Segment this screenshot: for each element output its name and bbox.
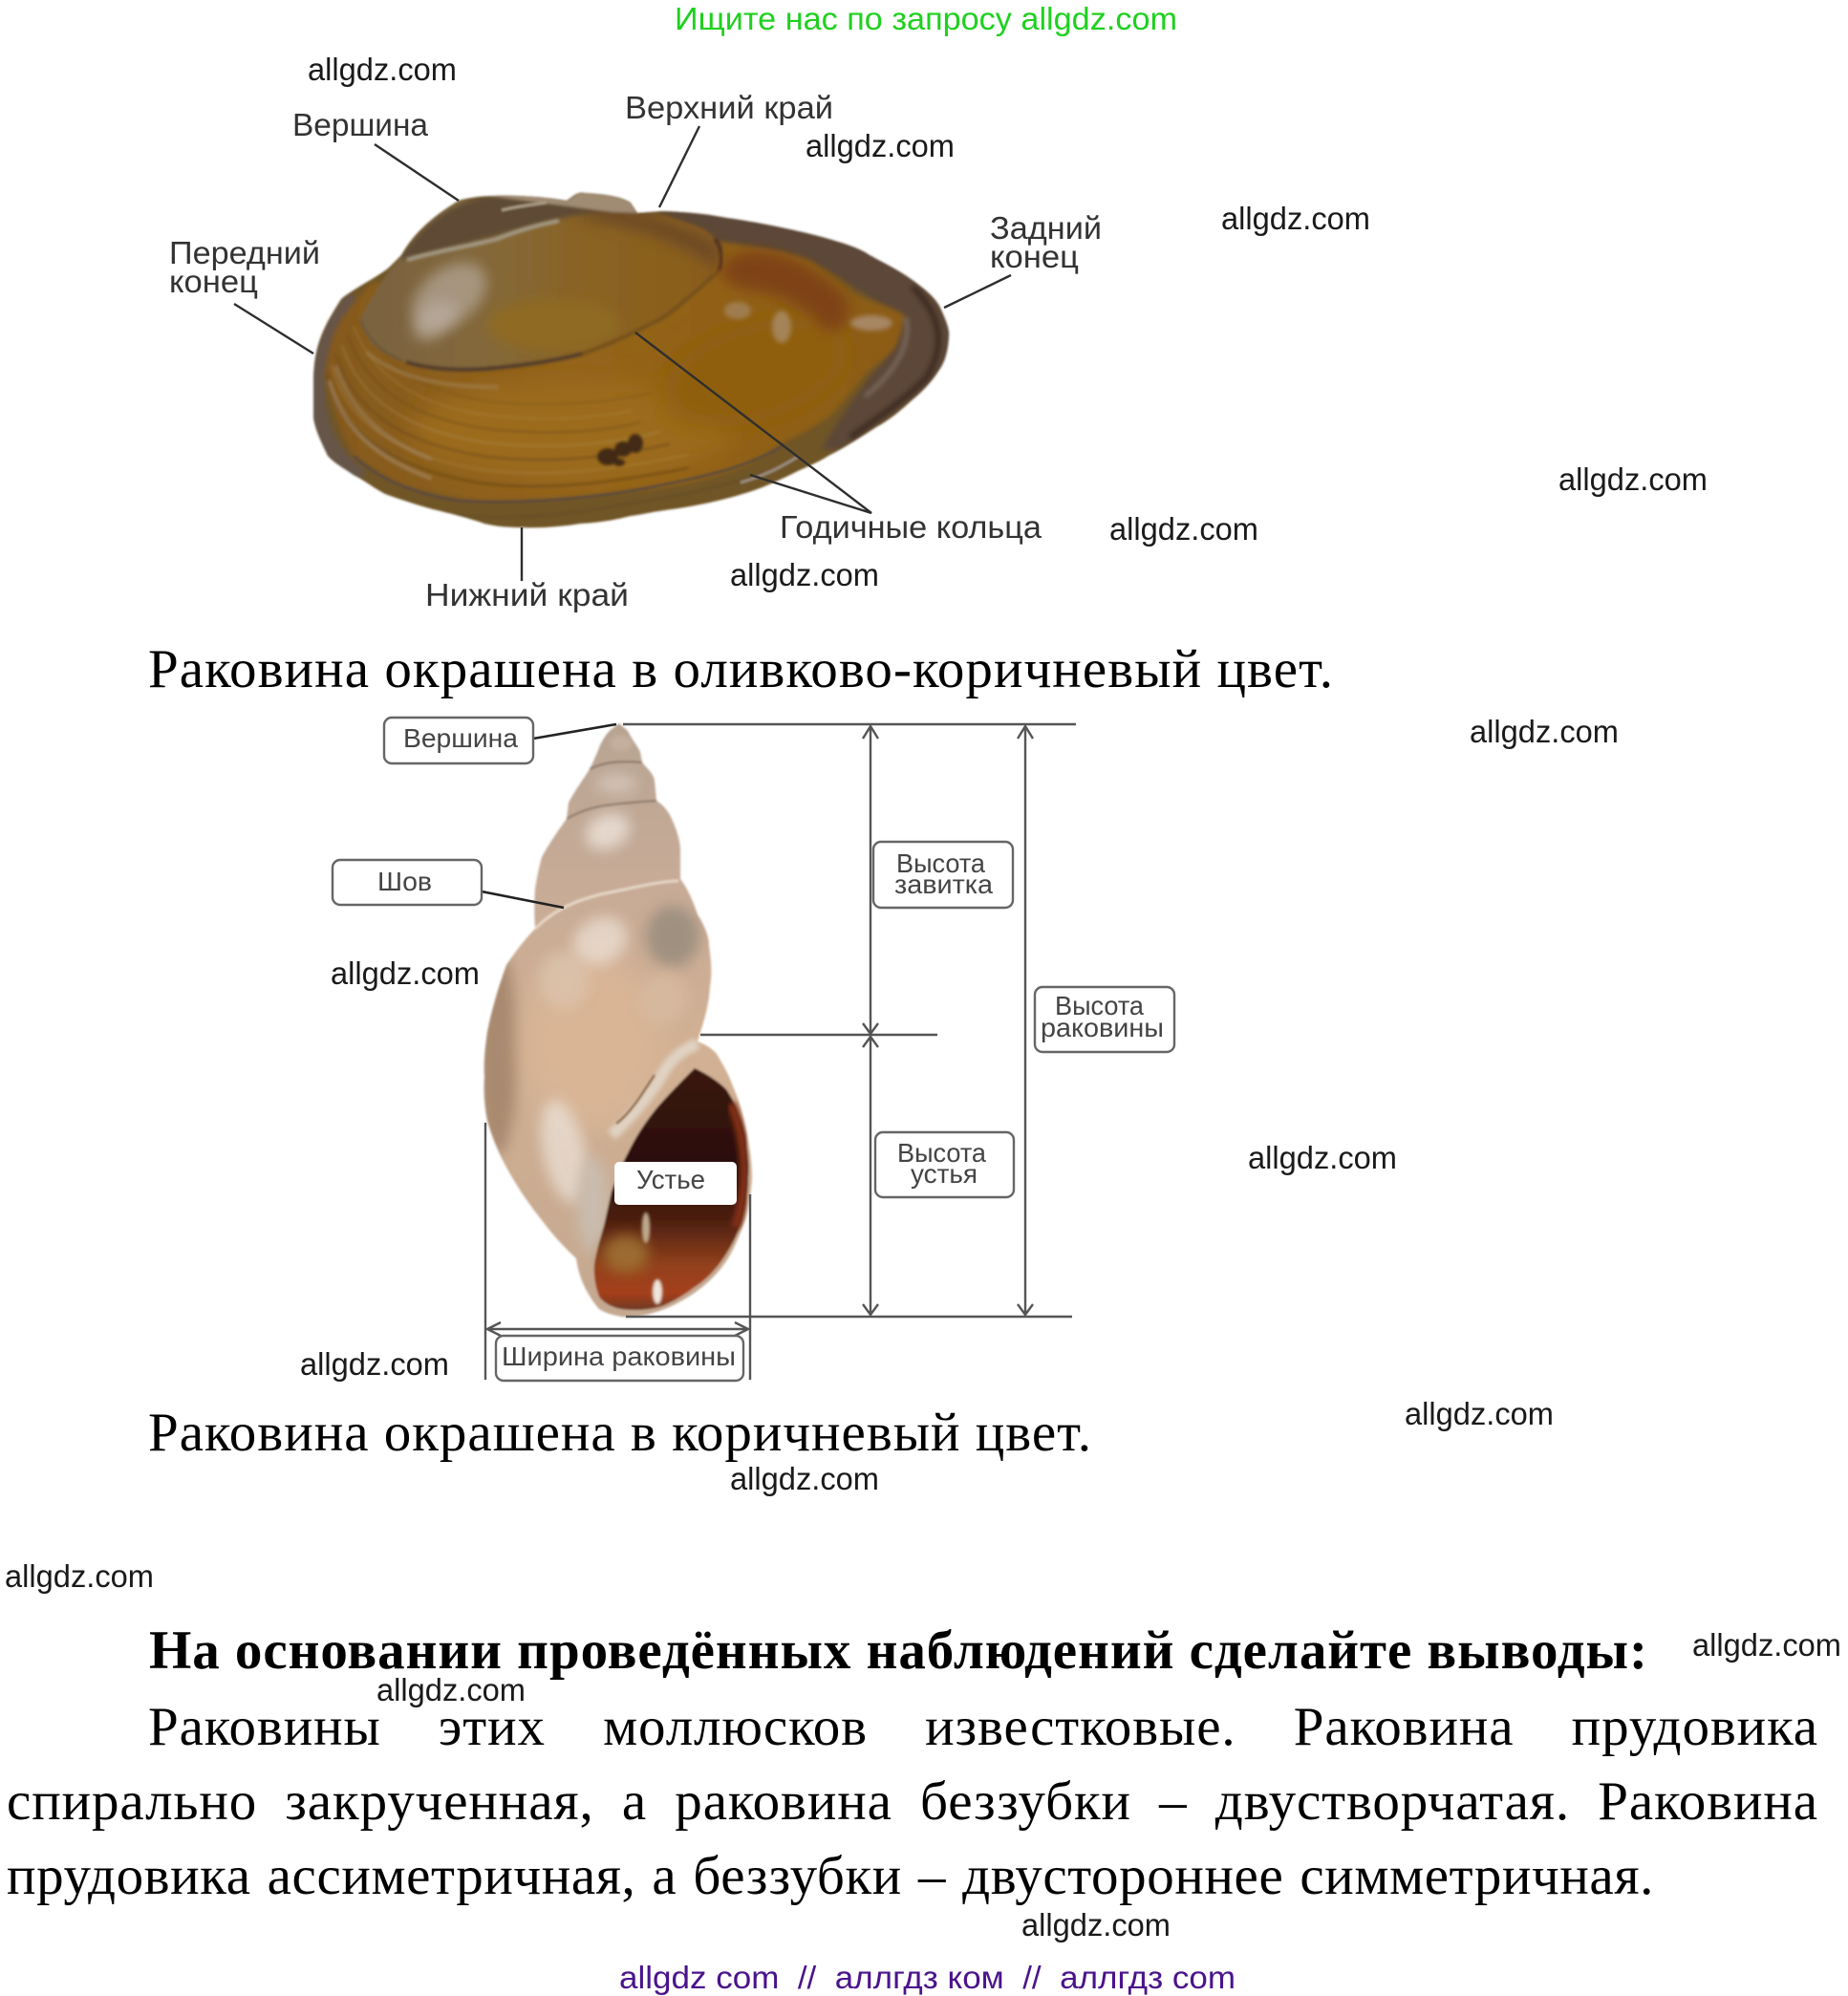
caption: snail colour: Раковина окрашена в коричневый цвет. xyxy=(148,1403,1091,1463)
label box: Ширина раковины: Ширина раковины xyxy=(502,1341,736,1371)
right side orange-brown zone xyxy=(721,251,849,331)
label box: Высота завитка: завитка xyxy=(894,869,993,899)
label box: Вершина (snail): Вершина xyxy=(403,723,518,753)
heading: conclusions: На основании проведённых наблюдений сделайте выводы: xyxy=(149,1620,1647,1681)
label: Задний конец xyxy=(944,210,1102,308)
label box: Высота завитка: Высота xyxy=(896,848,985,878)
watermarks: allgdz.com xyxy=(300,1346,449,1382)
watermarks: allgdz.com xyxy=(1021,1907,1171,1942)
illustration: mussel shell photo xyxy=(306,186,956,535)
label: Вершина (mussel) xyxy=(292,107,459,201)
lip and aperture xyxy=(612,1043,698,1135)
conclusions paragraph: спирально закрученная, а раковина беззубки – двустворчатая. Раковина xyxy=(7,1771,1818,1832)
watermarks: allgdz.com xyxy=(730,1461,879,1496)
watermarks: allgdz.com xyxy=(806,128,955,163)
label: Годичные кольца xyxy=(635,333,1042,545)
label: Нижний край: Нижний край xyxy=(425,577,629,612)
label box: Высота завитка xyxy=(873,842,1013,908)
conclusions paragraph: прудовика ассиметричная, а беззубки – двустороннее симметричная. xyxy=(7,1846,1654,1906)
dimension lines: snail measurements xyxy=(485,724,1076,1380)
watermarks: allgdz.com xyxy=(1470,714,1619,749)
label box: Шов: Шов xyxy=(377,867,432,896)
dome upper dark patch xyxy=(401,196,669,260)
label: Верхний край xyxy=(625,90,833,207)
conclusions paragraph: Раковины этих моллюсков известковые. Раковина прудовика xyxy=(148,1697,1818,1757)
label box: Устье xyxy=(614,1162,737,1205)
watermarks: allgdz.com xyxy=(308,52,457,87)
label: Верхний край: Верхний край xyxy=(625,90,833,125)
label box: Высота раковины xyxy=(1035,987,1174,1052)
dome highlights xyxy=(405,256,492,334)
label: Вершина (mussel): Вершина xyxy=(292,107,429,142)
bottom dark band xyxy=(354,445,784,502)
top search banner: Ищите нас по запросу allgdz.com xyxy=(675,1,1177,36)
body: golden lower shell xyxy=(325,242,905,501)
label: Передний конец: Передний xyxy=(169,235,320,270)
watermarks: allgdz.com xyxy=(1405,1396,1554,1431)
dome: upper shell area xyxy=(360,199,720,370)
whorl sutures xyxy=(535,881,678,929)
watermarks: allgdz.com xyxy=(1248,1140,1397,1175)
label: Задний конец: Задний xyxy=(990,210,1102,246)
label: Годичные кольца: Годичные кольца xyxy=(780,509,1042,545)
label box: Вершина (snail) xyxy=(384,718,616,763)
concentric growth rings xyxy=(327,334,690,488)
growth line xyxy=(361,320,401,360)
label: Передний конец xyxy=(169,235,320,354)
label box: Высота устья: устья xyxy=(911,1159,978,1189)
top and right grey-brown margin xyxy=(661,210,950,450)
footer site names: allgdz com // аллгдз ком // аллгдз com xyxy=(619,1960,1236,1995)
right streak highlights xyxy=(724,302,751,319)
watermarks: allgdz.com xyxy=(1558,461,1708,497)
left grey margin xyxy=(317,298,361,478)
watermarks: allgdz.com xyxy=(1692,1627,1841,1663)
label: Передний конец: конец xyxy=(169,264,258,299)
label box: Высота раковины: раковины xyxy=(1041,1013,1164,1042)
label box: Шов xyxy=(333,860,564,908)
watermarks: allgdz.com xyxy=(5,1558,154,1594)
illustration: pond snail shell photo xyxy=(476,717,760,1328)
watermarks: allgdz.com xyxy=(730,557,879,592)
watermarks: allgdz.com xyxy=(376,1672,526,1707)
label box: Высота устья xyxy=(875,1132,1014,1197)
watermarks: allgdz.com xyxy=(1109,511,1258,547)
label box: Ширина раковины xyxy=(496,1336,743,1381)
watermarks: allgdz.com xyxy=(1221,201,1370,236)
dark speckle spot xyxy=(597,434,643,466)
label box: Высота устья: Высота xyxy=(897,1138,986,1168)
label box: Устье: Устье xyxy=(636,1165,705,1194)
label: Задний конец: конец xyxy=(990,239,1079,274)
label box: Высота раковины: Высота xyxy=(1055,991,1144,1020)
caption: mussel colour: Раковина окрашена в оливково-коричневый цвет. xyxy=(148,639,1333,699)
right edge layers xyxy=(850,287,938,438)
watermarks: allgdz.com xyxy=(331,955,480,991)
